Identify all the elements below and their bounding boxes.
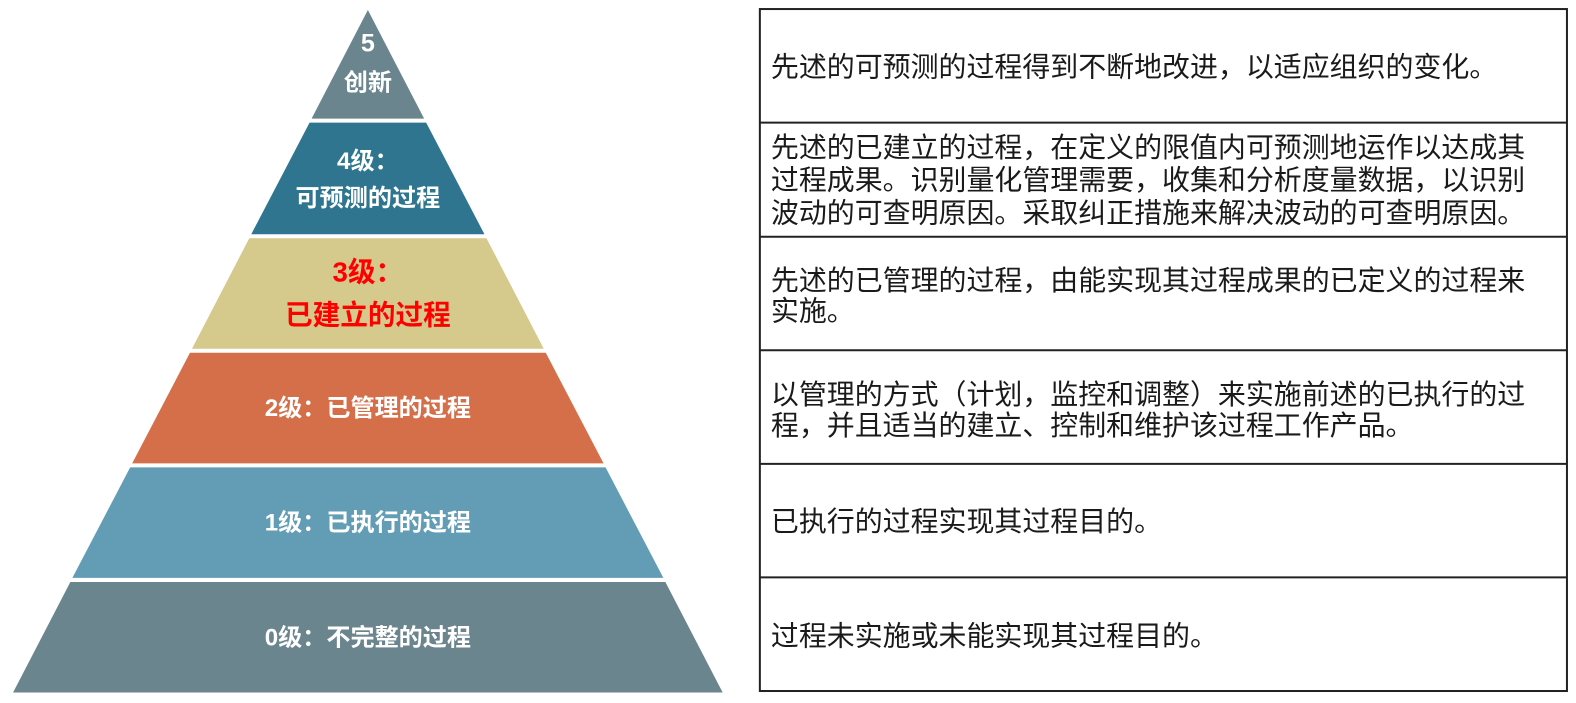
row text: level 1 description: 已执行的过程实现其过程目的。: [771, 506, 1162, 537]
row text: level 2 description: [771, 379, 1525, 441]
row text: level 4 description: 波动的可查明原因。采取纠正措施来解决波动的可查明原因。: [771, 198, 1525, 229]
level 5 layer: innovation: [312, 10, 424, 119]
row text: level 0 description: 过程未实施或未能实现其过程目的。: [771, 620, 1218, 651]
level 0 layer: incomplete process: [13, 582, 723, 693]
row text: level 2 description: 程，并且适当的建立、控制和维护该过程工作产品。: [771, 410, 1413, 441]
level 3 layer: established process: 3级：: [333, 256, 403, 287]
row text: level 5 description: 先述的可预测的过程得到不断地改进，以适应组织的变化。: [771, 51, 1497, 82]
row text: level 3 description: 先述的已管理的过程，由能实现其过程成果的已定义的过程来: [771, 265, 1525, 296]
level 2 layer: managed process: [132, 353, 604, 463]
row text: level 3 description: 实施。: [771, 296, 855, 327]
level 4 layer: predictable process: [251, 123, 484, 234]
level 1 layer: performed process: 1级：已执行的过程: [265, 510, 471, 537]
level 5 layer: innovation: 5: [361, 29, 375, 57]
level 3 layer: established process: 已建立的过程: [285, 300, 451, 331]
level 5 layer: innovation: 创新: [344, 69, 392, 96]
level 1 layer: performed process: [72, 467, 663, 578]
level 0 layer: incomplete process: 0级：不完整的过程: [265, 624, 471, 651]
table frame and row lines: [760, 9, 1567, 691]
level 4 layer: predictable process: 4级：: [337, 148, 399, 175]
description table: [760, 9, 1567, 691]
row text: level 2 description: 以管理的方式（计划，监控和调整）来实施前述的已执行的过: [771, 379, 1525, 410]
level 3 layer: established process: [192, 238, 544, 349]
level 2 layer: managed process: 2级：已管理的过程: [265, 395, 471, 422]
row text: level 4 description: 过程成果。识别量化管理需要，收集和分析度量数据，以识别: [771, 164, 1525, 195]
row text: level 4 description: 先述的已建立的过程，在定义的限值内可预测地运作以达成其: [771, 132, 1525, 163]
pyramid chart: [13, 10, 723, 693]
level 4 layer: predictable process: 可预测的过程: [296, 185, 440, 212]
row text: level 3 description: [771, 265, 1525, 327]
row text: level 4 description: [771, 132, 1525, 229]
